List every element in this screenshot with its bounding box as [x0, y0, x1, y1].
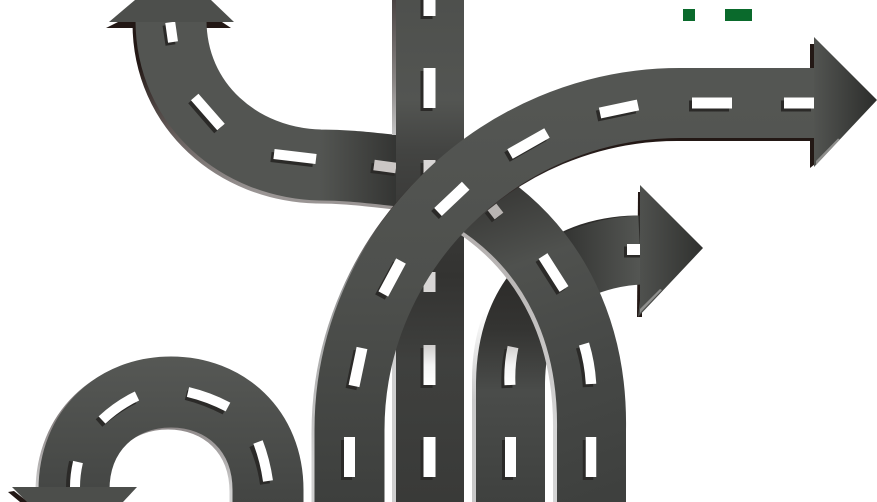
down arrow head: [8, 487, 137, 502]
top-left road dashes: [168, 22, 396, 171]
road: top-left curve with up arrow: [106, 0, 410, 175]
big road dashes: [346, 103, 814, 480]
road: big curve with right arrow: [346, 37, 877, 502]
right arrow head small: [638, 185, 703, 317]
road: bottom-left U-turn with down arrow: [8, 392, 268, 502]
U-turn dashes: [71, 392, 268, 487]
road: center vertical: [392, 0, 464, 502]
center road dashes: [426, 0, 430, 480]
road: outer arch: [466, 195, 592, 502]
road: inner arch to right arrow: [506, 185, 703, 502]
inner arch dashes: [507, 250, 640, 480]
right arrow head large: [814, 37, 877, 167]
outer arch dashes: [489, 207, 591, 480]
up arrow head: [109, 0, 234, 22]
green dash marks: [683, 9, 752, 21]
